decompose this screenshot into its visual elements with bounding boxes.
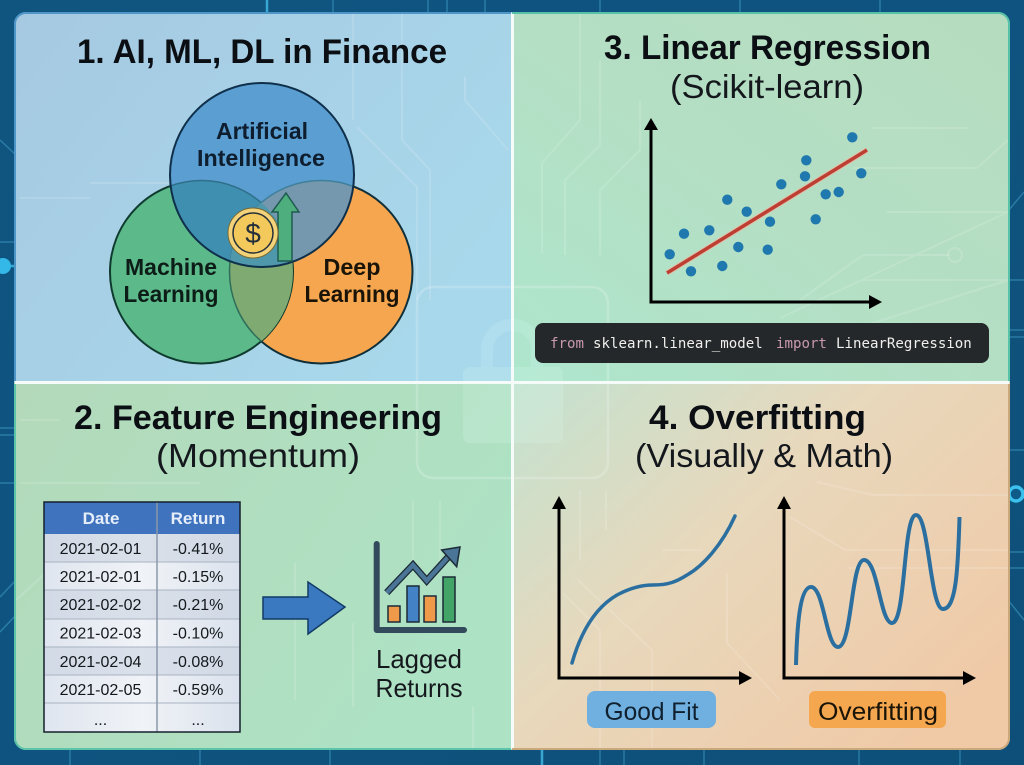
code snippet: sklearn.linear_model (593, 336, 763, 352)
data table: 2021-02-04 (60, 654, 142, 671)
divider horizontal (15, 381, 1009, 384)
heading 3: 3. Linear Regression (604, 29, 931, 67)
data table: 2021-02-01 (60, 541, 142, 558)
panel: overfitting background (512, 382, 1010, 750)
label: intelligence: Intelligence (197, 145, 325, 171)
overlap: ML and DL (228, 262, 293, 342)
label: learning right: Learning (304, 281, 400, 307)
overlap: AI and DL (230, 180, 352, 260)
data table: Date (83, 509, 119, 528)
subheading 4: (Visually & Math) (635, 437, 893, 474)
venn diagram (110, 83, 412, 364)
axes (651, 126, 872, 302)
glow node right (1009, 487, 1023, 501)
chart: good fit (552, 496, 752, 685)
data table: -0.41% (173, 541, 223, 558)
code snippet: from (550, 336, 584, 352)
data table: ... (94, 712, 107, 729)
label: lagged: Lagged (376, 644, 462, 674)
chart: overfitting (777, 496, 976, 685)
data table: -0.15% (173, 569, 223, 586)
data table: 2021-02-05 (60, 682, 142, 699)
divider vertical (511, 13, 514, 749)
circle: deep learning (230, 180, 412, 364)
arrow (263, 582, 345, 634)
heading 2: 2. Feature Engineering (74, 399, 442, 437)
label: good fit: Good Fit (604, 698, 699, 726)
board outline (417, 287, 608, 478)
label: deep: Deep (324, 254, 380, 280)
data table: 2021-02-03 (60, 626, 142, 642)
label: good fit (587, 691, 716, 728)
label: artificial: Artificial (216, 118, 308, 144)
panel 4: Overfitting (552, 399, 976, 728)
AI outline (170, 83, 354, 267)
data table: 2021-02-02 (60, 597, 142, 614)
panel 3: Linear Regression (535, 29, 989, 363)
data table: -0.08% (173, 654, 223, 671)
overlap: AI and ML (172, 180, 262, 260)
label: returns: Returns (376, 673, 462, 703)
data table: Return (171, 509, 225, 528)
panel: AI, ML, DL background (14, 12, 512, 382)
icon: dollar coin: $ (245, 218, 261, 249)
data table: -0.21% (173, 597, 223, 614)
label: machine: Machine (125, 254, 217, 280)
icon: bar chart with trend (377, 544, 464, 630)
label: overfitting (809, 691, 946, 728)
data table: -0.59% (173, 682, 223, 699)
label: overfitting: Overfitting (818, 698, 938, 726)
lock watermark (463, 325, 563, 443)
table header (44, 502, 240, 534)
label: learning left: Learning (124, 281, 218, 307)
data table: -0.10% (173, 626, 223, 642)
panel: linear regression background (512, 12, 1010, 382)
heading 4: 4. Overfitting (649, 399, 866, 437)
icon: growth arrow (272, 193, 299, 261)
data table: ... (191, 712, 205, 729)
circle: artificial intelligence (170, 83, 354, 267)
panel: feature engineering background (14, 382, 512, 750)
icon: dollar coin (228, 208, 278, 258)
code snippet (535, 323, 989, 363)
panel 2: Feature Engineering (44, 399, 464, 732)
regression line (667, 150, 867, 273)
circle: machine learning (110, 180, 293, 364)
code snippet: import (776, 336, 827, 352)
data points (664, 132, 866, 276)
code snippet: LinearRegression (836, 336, 972, 352)
data table (44, 502, 240, 732)
subheading 2: (Momentum) (156, 437, 360, 474)
glow node left (0, 258, 11, 274)
scatter chart (644, 118, 882, 309)
heading 1: 1. AI, ML, DL in Finance (77, 33, 447, 71)
panel 1: AI, ML, DL in Finance (77, 33, 447, 364)
table rows (44, 534, 240, 732)
center overlap (230, 202, 290, 266)
data table: 2021-02-01 (60, 569, 142, 586)
subheading 3: (Scikit-learn) (670, 68, 864, 105)
